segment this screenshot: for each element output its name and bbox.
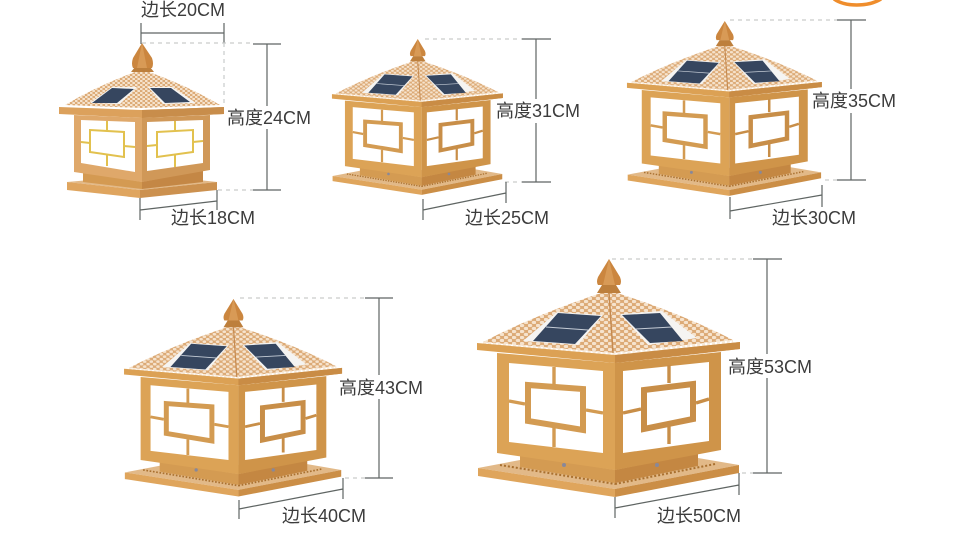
- lamp 4: 40cm post light: [124, 299, 342, 497]
- dimension: lamp 1 base width: 边长18CM: [171, 208, 255, 228]
- dimension: lamp 3 base width: [730, 185, 856, 228]
- dimension: lamp 2 base width: 边长25CM: [465, 208, 549, 228]
- dimension: lamp 4 base width: [239, 478, 366, 526]
- dimension: lamp 1 top width: [141, 0, 225, 44]
- dimension: lamp 1 top width: 边长20CM: [141, 0, 225, 20]
- dimension: lamp 2 height: 高度31CM: [496, 101, 580, 121]
- dimension: lamp 1 base width: [140, 190, 255, 228]
- dimension: lamp 3 height: 高度35CM: [812, 91, 896, 111]
- dimension: lamp 5 height: [612, 259, 812, 473]
- dimension: lamp 5 height: 高度53CM: [728, 357, 812, 377]
- lamp 1: 20cm square post light with yellow frames: [59, 43, 224, 198]
- dimension: lamp 4 base width: 边长40CM: [282, 506, 366, 526]
- dimension: lamp 3 height: [730, 20, 896, 180]
- lamp 2: 25cm post light: [332, 39, 503, 195]
- decorative logo arc: [834, 0, 881, 5]
- dimension: lamp 5 base width: [615, 473, 741, 526]
- dimension: lamp 1 height: 高度24CM: [227, 108, 311, 128]
- dimension: lamp 4 height: [240, 298, 423, 478]
- lamp 3: 30cm post light: [627, 21, 822, 196]
- dimension: lamp 3 base width: 边长30CM: [772, 208, 856, 228]
- lamp 5: 50cm post light: [477, 259, 740, 497]
- dimension: lamp 2 height: [425, 39, 580, 182]
- dimension: lamp 5 base width: 边长50CM: [657, 506, 741, 526]
- dimension: lamp 4 height: 高度43CM: [339, 378, 423, 398]
- dimension: lamp 1 height: [142, 43, 311, 190]
- dimension: lamp 2 base width: [423, 182, 549, 228]
